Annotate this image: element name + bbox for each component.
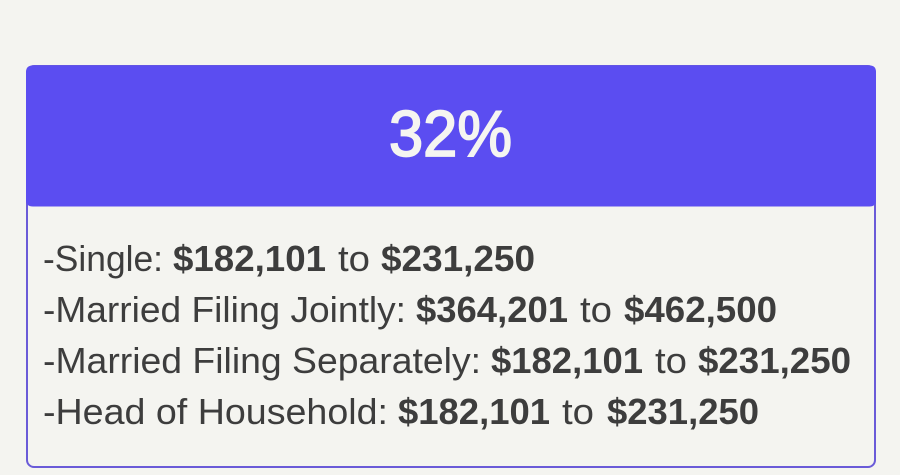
text block: income ranges by filing status	[43, 238, 851, 432]
line: single: -Single:	[43, 238, 163, 279]
line: married filing jointly: $364,201	[416, 289, 568, 330]
line: married filing jointly	[43, 289, 777, 330]
line: married filing separately: $231,250	[698, 340, 851, 381]
line: head of household: $182,101	[398, 391, 550, 432]
line: married filing jointly: $462,500	[624, 289, 777, 330]
line: married filing separately: -Married Filing Separately:	[43, 340, 481, 381]
panel: 32% tax bracket card	[26, 66, 876, 467]
line: married filing jointly: to	[580, 289, 612, 330]
heading: 32%: 32%	[389, 97, 512, 170]
line: head of household: to	[562, 391, 594, 432]
line: married filing separately: $182,101	[491, 340, 643, 381]
card header band	[26, 66, 876, 206]
line: single	[43, 238, 535, 279]
line: single: to	[338, 238, 370, 279]
line: head of household: -Head of Household:	[43, 391, 388, 432]
line: head of household: $231,250	[607, 391, 759, 432]
line: married filing separately: to	[655, 340, 687, 381]
line: head of household	[43, 391, 759, 432]
line: married filing jointly: -Married Filing Jointly:	[43, 289, 406, 330]
line: single: $182,101	[173, 238, 326, 279]
line: married filing separately	[43, 340, 851, 381]
line: single: $231,250	[381, 238, 535, 279]
